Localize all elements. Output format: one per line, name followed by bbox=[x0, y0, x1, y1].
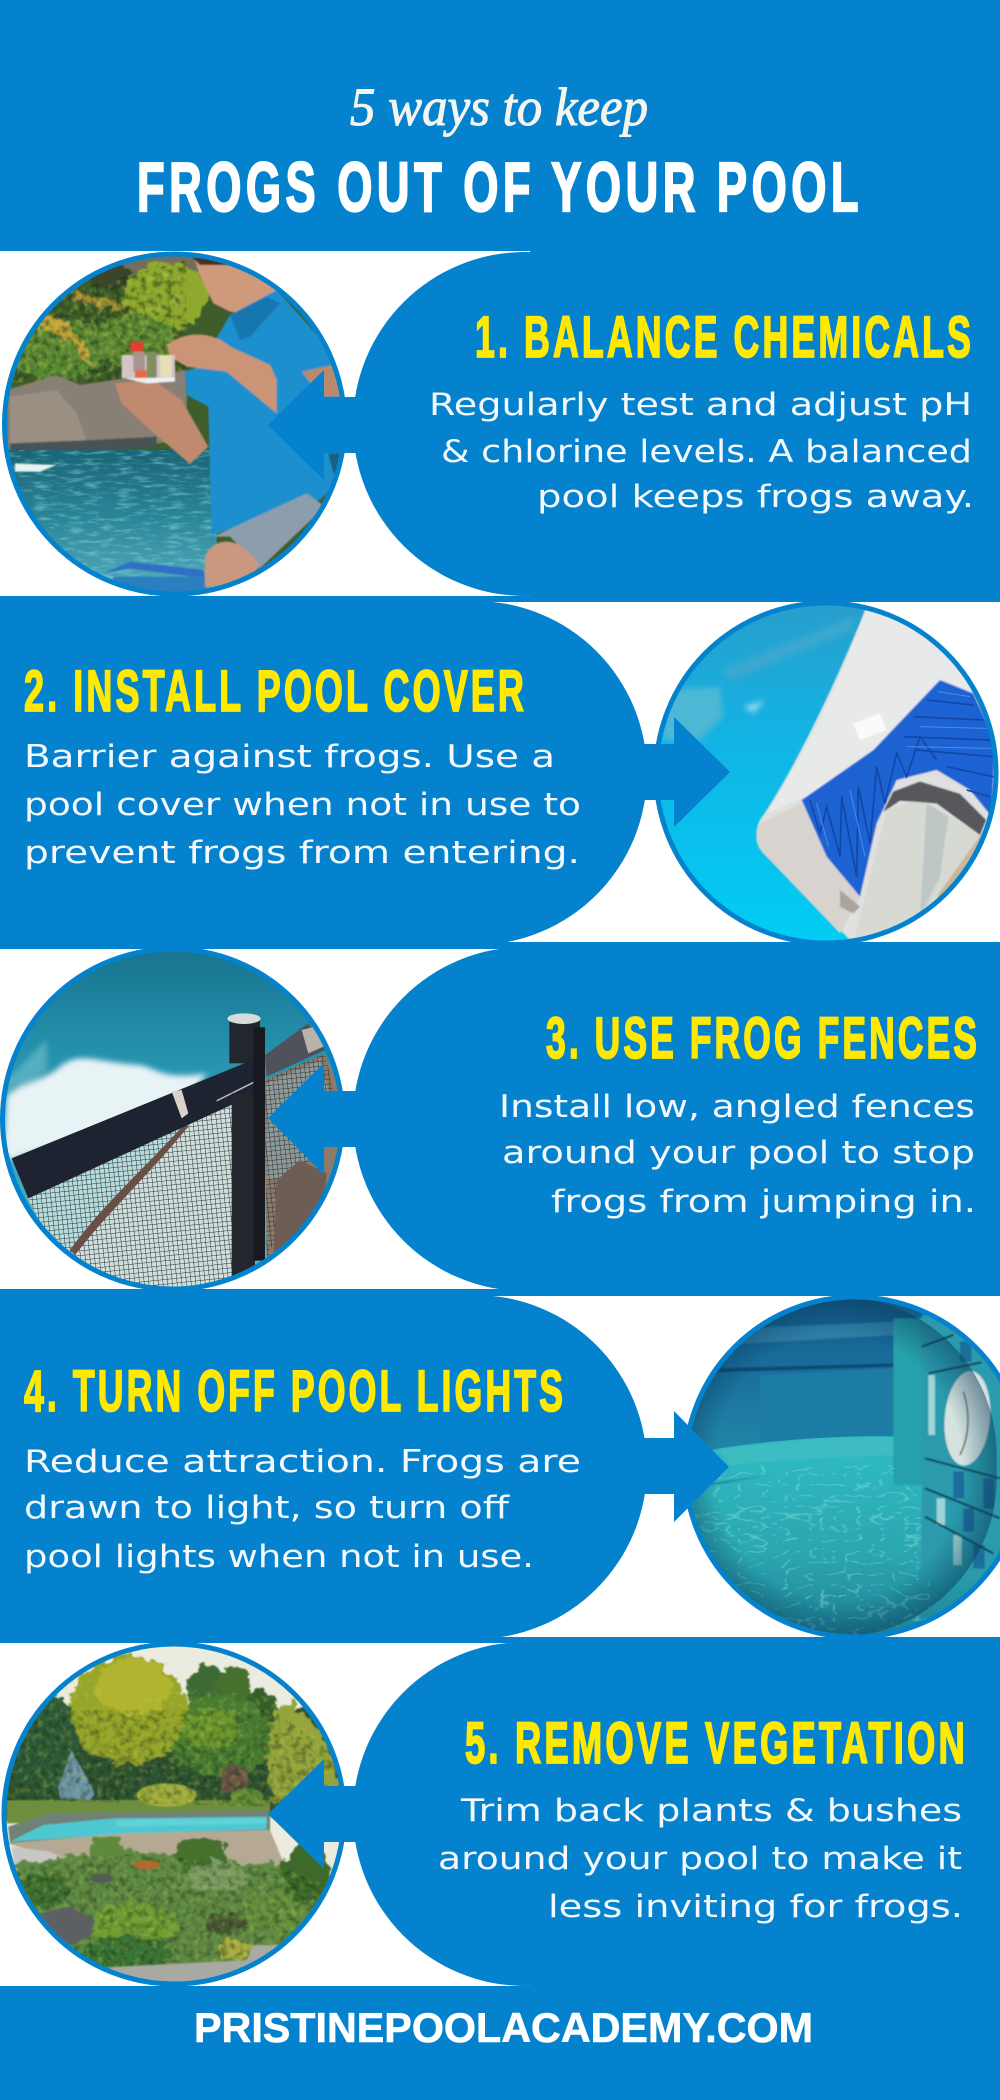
body text: Trim back plants & bushes bbox=[460, 1793, 962, 1829]
photo: garden around pool bbox=[6, 1646, 340, 1982]
body text: Install low, angled fences bbox=[499, 1089, 975, 1125]
header bbox=[137, 77, 863, 226]
panel: turn off pool lights bbox=[24, 1285, 1000, 1652]
body text: prevent frogs from entering. bbox=[24, 835, 580, 871]
panel: remove vegetation bbox=[0, 1630, 968, 1997]
panel: install pool cover bbox=[24, 590, 1000, 957]
body text bbox=[24, 1444, 581, 1575]
body text: Regularly test and adjust pH bbox=[429, 387, 972, 423]
blue shape with right arrow bbox=[303, 601, 730, 945]
footer website: PRISTINEPOOLACADEMY.COM bbox=[194, 2004, 813, 2051]
photo ring bbox=[4, 1644, 344, 1984]
photo ring bbox=[685, 1297, 1000, 1637]
photo: pool cover roll bbox=[660, 606, 994, 940]
body text: around your pool to make it bbox=[438, 1841, 962, 1877]
heading: 4. TURN OFF POOL LIGHTS bbox=[24, 1359, 566, 1424]
body text: pool cover when not in use to bbox=[24, 787, 581, 823]
body text: pool lights when not in use. bbox=[24, 1539, 534, 1575]
body text: pool keeps frogs away. bbox=[537, 479, 974, 515]
blue shape with left arrow bbox=[268, 1642, 697, 1986]
blue shape with left arrow bbox=[268, 252, 697, 596]
heading: 2. INSTALL POOL COVER bbox=[24, 659, 527, 724]
body text: frogs from jumping in. bbox=[551, 1184, 976, 1220]
photo: underwater pool light bbox=[692, 1300, 1000, 1634]
panel: balance chemicals bbox=[0, 240, 974, 600]
photo ring bbox=[4, 254, 344, 594]
body text bbox=[438, 1793, 963, 1925]
body text: Barrier against frogs. Use a bbox=[24, 739, 555, 775]
body text: around your pool to stop bbox=[502, 1135, 975, 1171]
photo: pool safety fence bbox=[5, 952, 338, 1286]
body text: Reduce attraction. Frogs are bbox=[24, 1444, 581, 1480]
photo ring bbox=[656, 603, 996, 943]
blue shape with right arrow bbox=[303, 1295, 729, 1639]
photo ring bbox=[2, 949, 342, 1289]
photo: man testing pool water bbox=[7, 256, 340, 592]
blue shape with left arrow bbox=[268, 947, 697, 1291]
panel: use frog fences bbox=[0, 940, 980, 1307]
subtitle: 5 ways to keep bbox=[350, 77, 648, 137]
body text: less inviting for frogs. bbox=[548, 1889, 963, 1925]
body text: & chlorine levels. A balanced bbox=[441, 434, 972, 470]
body text bbox=[24, 739, 581, 871]
body text bbox=[429, 387, 974, 515]
body text bbox=[499, 1089, 976, 1220]
body text: drawn to light, so turn off bbox=[24, 1490, 510, 1526]
